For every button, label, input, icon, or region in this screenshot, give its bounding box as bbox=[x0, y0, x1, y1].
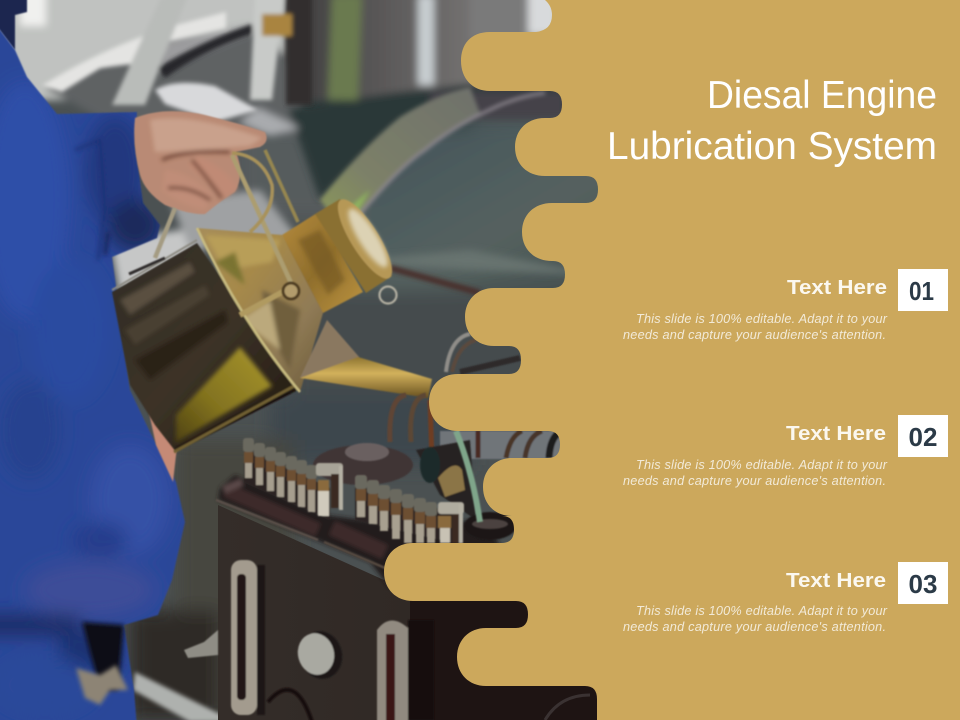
can cap bbox=[315, 199, 392, 293]
title: Diesal Engine bbox=[707, 74, 937, 117]
item 03 number box: 03 bbox=[909, 569, 937, 599]
background: engine room bbox=[0, 0, 640, 720]
title: Lubrication System bbox=[607, 125, 937, 168]
dark arc at bottom bbox=[545, 695, 590, 720]
item 01 description bbox=[623, 312, 888, 342]
jacket: blue work coat bbox=[0, 29, 186, 720]
item 03 bbox=[623, 562, 948, 634]
item 01 description: needs and capture your audience's attention. bbox=[623, 328, 886, 342]
brass name badge bbox=[293, 626, 347, 684]
central oil reservoir bbox=[313, 440, 476, 520]
item 02 bbox=[623, 415, 948, 488]
item 02 description: needs and capture your audience's attention. bbox=[623, 474, 886, 488]
item 01 bbox=[623, 269, 948, 342]
hand under the can bbox=[148, 355, 194, 482]
item 03 description: This slide is 100% editable. Adapt it to your bbox=[636, 604, 888, 618]
item 03 description bbox=[623, 604, 888, 634]
green oil tube bbox=[456, 431, 480, 522]
item 02 number box: 02 bbox=[909, 422, 937, 452]
ring on cap bbox=[380, 286, 396, 304]
sight feed row one bbox=[243, 438, 343, 520]
item 01 description: This slide is 100% editable. Adapt it to your bbox=[636, 312, 888, 326]
rag in pocket bbox=[76, 665, 128, 705]
can neck bbox=[282, 213, 363, 313]
item 01 heading: Text Here bbox=[787, 276, 887, 299]
oil cup bbox=[464, 512, 516, 540]
oil can bbox=[112, 150, 432, 460]
title bbox=[607, 74, 937, 168]
left sight glass bbox=[231, 560, 265, 715]
collar bbox=[0, 0, 27, 50]
can body bbox=[112, 243, 298, 452]
item 02 heading: Text Here bbox=[786, 422, 886, 445]
item 01 number box: 01 bbox=[909, 276, 934, 306]
side knob bbox=[184, 630, 218, 658]
copper feed pipes bbox=[390, 334, 565, 460]
item 03 description: needs and capture your audience's attention. bbox=[623, 620, 886, 634]
item 02 number box bbox=[898, 415, 948, 457]
item 03 heading: Text Here bbox=[786, 569, 886, 592]
funnel shoulder bbox=[197, 228, 323, 392]
right sight glass bbox=[377, 620, 434, 720]
item 01 number box bbox=[898, 269, 948, 311]
gold wavy panel bbox=[384, 0, 960, 720]
item 02 description: This slide is 100% editable. Adapt it to your bbox=[636, 458, 888, 472]
item 02 description bbox=[623, 458, 888, 488]
photo: worker pouring oil into a lubricator bbox=[0, 0, 640, 720]
handle rods bbox=[232, 155, 292, 285]
door arc bbox=[268, 690, 312, 720]
hand holding the handle bbox=[134, 111, 267, 214]
lubricator box bbox=[184, 431, 640, 720]
sight feed row two bbox=[355, 475, 464, 545]
item 03 number box bbox=[898, 562, 948, 604]
spout bbox=[300, 320, 360, 378]
